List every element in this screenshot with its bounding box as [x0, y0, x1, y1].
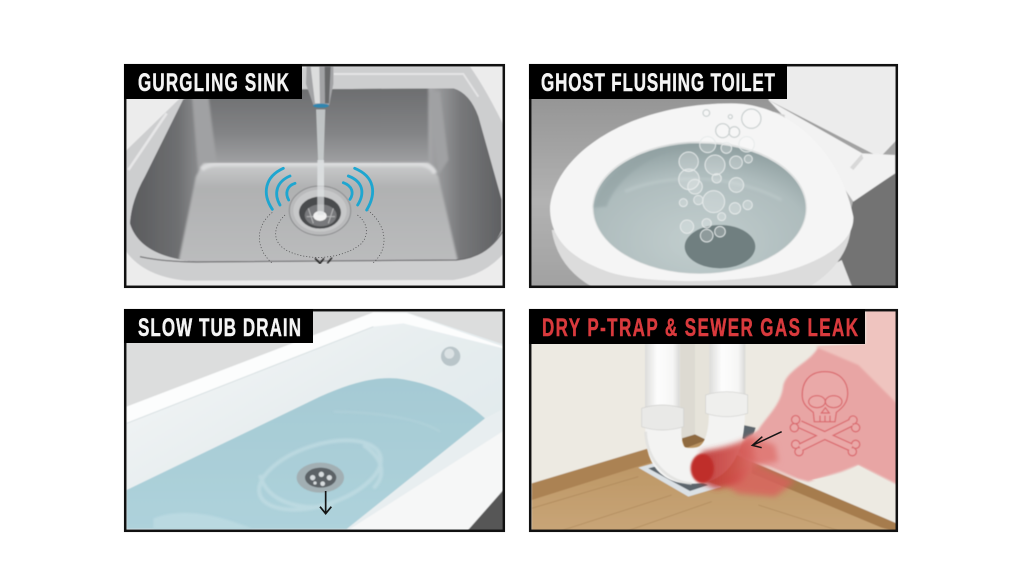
sink rim [125, 67, 507, 281]
panel: slow tub drain [120, 305, 510, 535]
water [127, 378, 485, 529]
toilet base [811, 260, 852, 286]
heading: gurgling sink: GURGLING SINK [138, 69, 289, 97]
heading: gurgling sink [124, 64, 302, 99]
corner wall shade [680, 342, 695, 442]
icon: down arrow [320, 491, 331, 514]
red gas over pipe [700, 436, 757, 489]
water stream [316, 108, 326, 162]
sewer gas cloud [725, 312, 896, 499]
dotted ripples [259, 211, 384, 263]
floor vent [638, 462, 722, 497]
wooden floor [532, 440, 892, 530]
panel frame [530, 65, 897, 287]
panel frame [530, 310, 897, 531]
toilet seat [550, 103, 853, 293]
basin [130, 88, 502, 262]
illustration: p-trap pipes [525, 305, 905, 535]
water ripples [257, 438, 384, 512]
white plumbing pipes [642, 342, 748, 484]
pipe opening [691, 454, 714, 483]
icon: skull and crossbones [790, 372, 860, 456]
panel: gurgling sink [120, 60, 510, 295]
panel frame [125, 310, 504, 531]
tub body [127, 312, 503, 532]
heading: ghost flushing toilet: GHOST FLUSHING TOILET [541, 69, 775, 97]
illustration: bathtub [120, 305, 510, 535]
bowl water [592, 141, 807, 274]
heading: slow tub drain: SLOW TUB DRAIN [138, 314, 301, 342]
toilet tank [768, 65, 897, 157]
heading: dry p-trap and sewer gas leak: DRY P-TRAP & SEWER GAS LEAK [542, 314, 858, 342]
drain hole [685, 225, 755, 268]
panel: dry p-trap and sewer gas leak [525, 305, 905, 535]
illustration: stainless steel sink [126, 66, 503, 286]
x mark [315, 258, 332, 263]
baseboards [532, 448, 653, 500]
icon: drain strainer [289, 160, 351, 235]
icon: black arrow [752, 432, 782, 448]
floor planks [532, 477, 842, 532]
icon: tub drain [297, 463, 344, 493]
illustration: toilet bowl [531, 66, 896, 286]
panel frame [125, 65, 504, 287]
icon: faucet [306, 67, 333, 108]
tub front rim [347, 430, 503, 532]
panel: ghost flushing toilet [525, 60, 905, 295]
icon: overflow plate [441, 347, 460, 366]
hinge and tank arm [768, 100, 895, 202]
icon: blue sound waves [266, 168, 373, 210]
icon: rising bubbles [679, 109, 761, 242]
